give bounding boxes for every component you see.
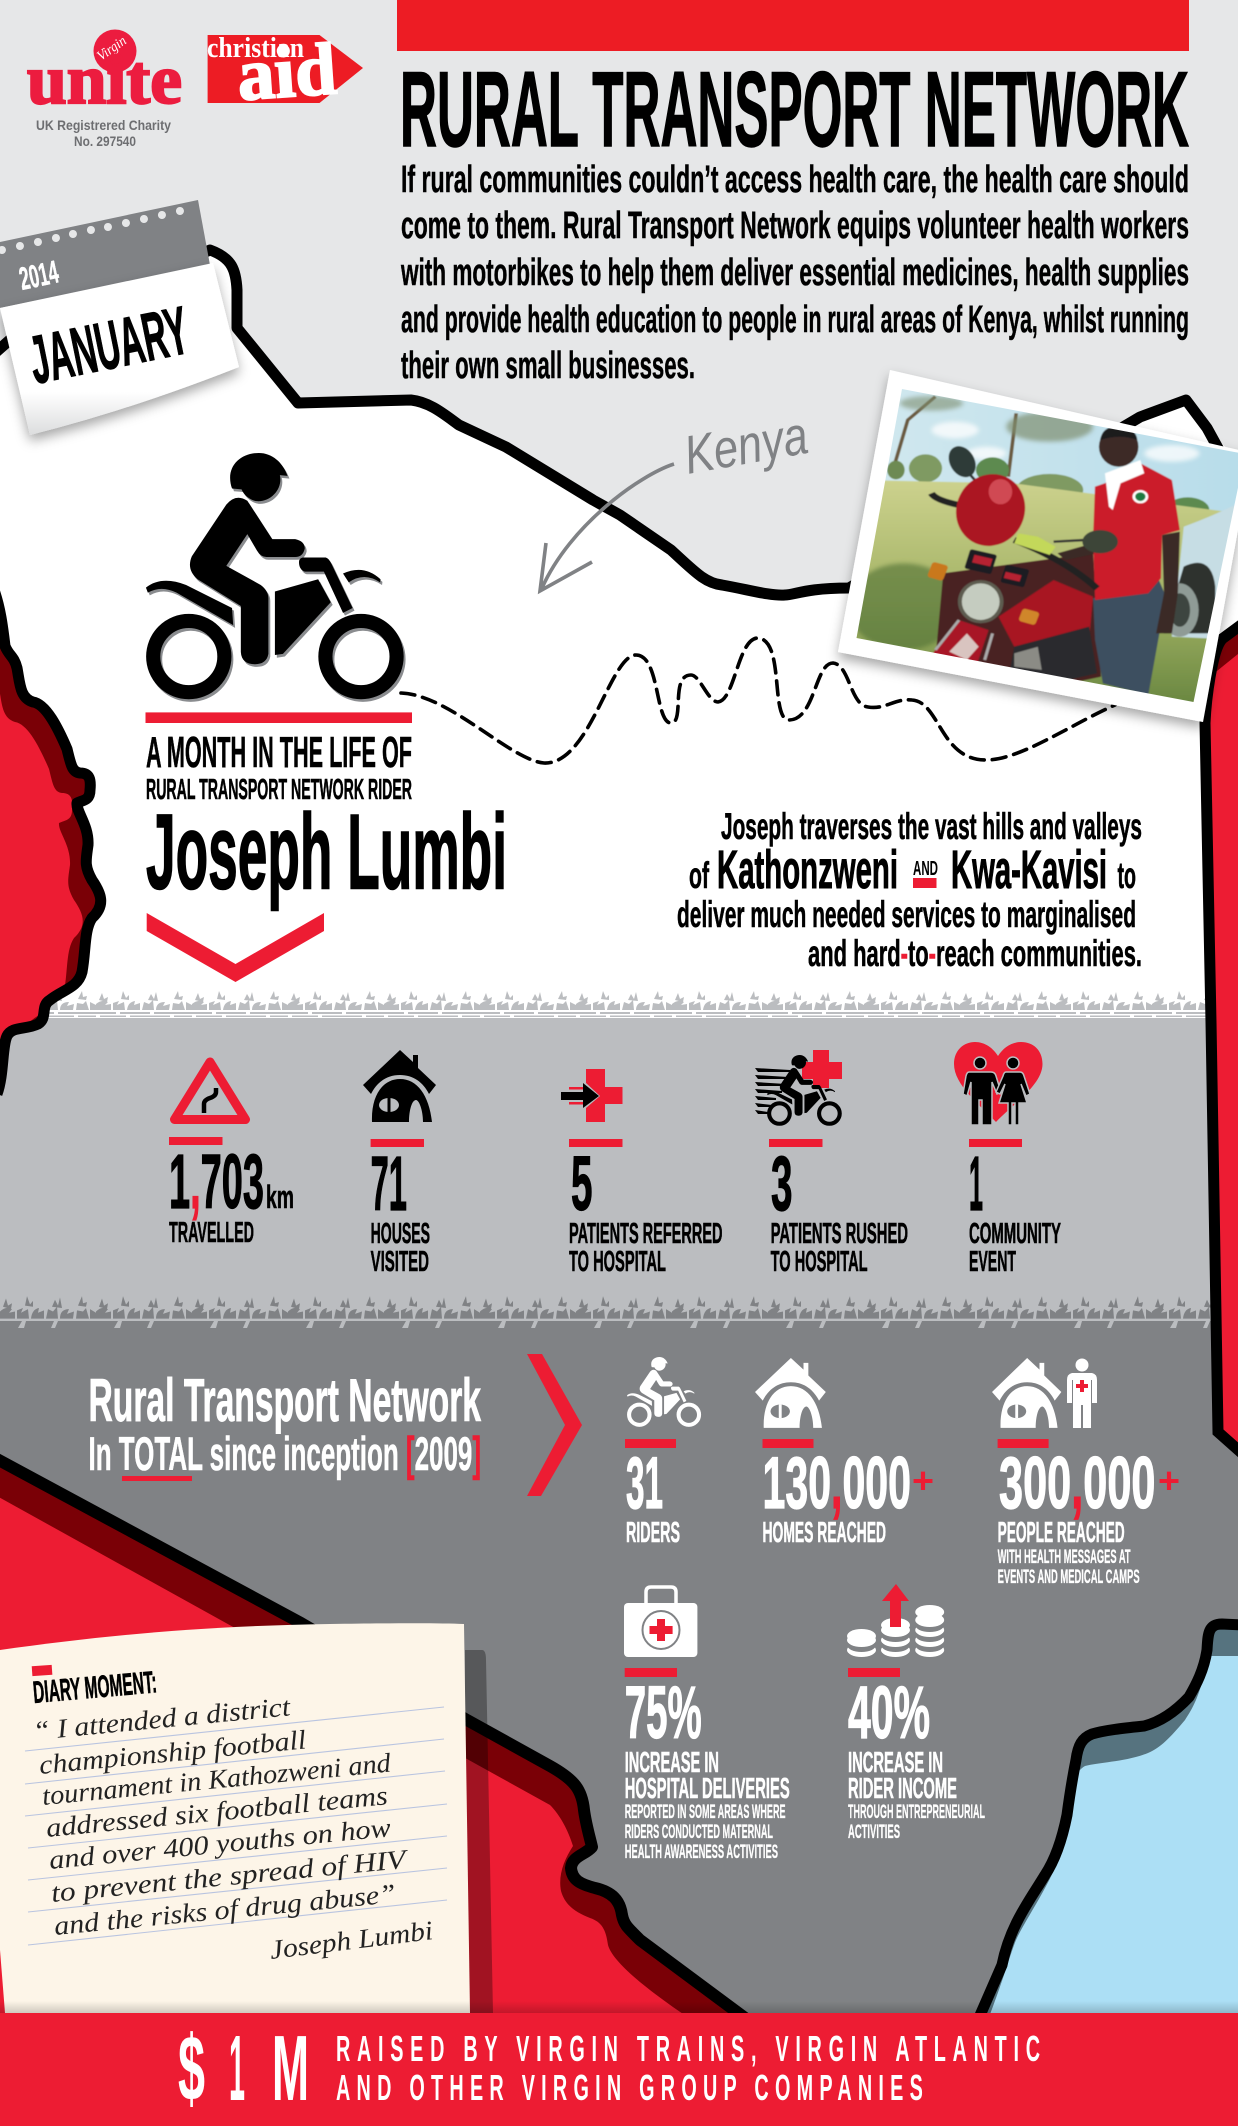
tyre track: white to light grey bbox=[0, 990, 1238, 1018]
diary note: “ I attended a district bbox=[32, 1691, 293, 1746]
total: 40% rider income: ACTIVITIES bbox=[848, 1822, 900, 1843]
total: 300,000+ people reached bbox=[992, 1358, 1180, 1588]
total: 75% hospital deliveries: HOSPITAL DELIVERIES bbox=[625, 1773, 790, 1805]
map: Indian Ocean blue region bbox=[978, 1624, 1238, 2020]
stat: 5 patients referred to hospital: TO HOSPITAL bbox=[569, 1246, 666, 1278]
total: 300,000+ people reached: + bbox=[1158, 1460, 1180, 1501]
footer band bbox=[0, 2013, 1238, 2126]
map: lower-left red region (Tanzania) bbox=[0, 1458, 745, 2018]
stat: 1,703 km travelled: 1,703 bbox=[169, 1139, 264, 1225]
stat: 1,703 km travelled: TRAVELLED bbox=[169, 1217, 254, 1249]
total: 40% rider income: 40% bbox=[848, 1671, 930, 1754]
calendar: January 2014: JANUARY bbox=[23, 292, 195, 399]
diary note: and the risks of drug abuse” bbox=[53, 1878, 397, 1941]
calendar: January 2014: 2014 bbox=[16, 254, 62, 297]
total: 75% hospital deliveries: RIDERS CONDUCTED MATERNAL bbox=[625, 1822, 773, 1843]
total: 130,000+ homes reached: HOMES REACHED bbox=[762, 1517, 886, 1549]
diary note: championship football bbox=[38, 1724, 307, 1780]
total: 75% hospital deliveries: INCREASE IN bbox=[625, 1747, 719, 1779]
intro paragraph: their own small businesses. bbox=[401, 345, 695, 387]
total: 75% hospital deliveries: 75% bbox=[625, 1671, 702, 1754]
diary note: DIARY MOMENT: bbox=[32, 1664, 158, 1710]
stat: 1 community event bbox=[954, 1042, 1061, 1278]
total: 130,000+ homes reached bbox=[755, 1358, 934, 1549]
total: 75% hospital deliveries bbox=[624, 1587, 790, 1863]
stat: 1 community event: EVENT bbox=[969, 1246, 1016, 1278]
logo: Virgin Unite bbox=[27, 30, 182, 149]
total: 40% rider income: INCREASE IN bbox=[848, 1747, 943, 1779]
footer band: 1 bbox=[229, 2016, 245, 2120]
totals heading bbox=[88, 1367, 481, 1481]
total: 40% rider income bbox=[847, 1584, 985, 1843]
footer band: AND OTHER VIRGIN GROUP COMPANIES bbox=[336, 2069, 923, 2109]
stat: 71 houses visited: VISITED bbox=[371, 1246, 429, 1278]
logo: Virgin Unite: Virgin bbox=[95, 34, 130, 64]
handwritten label: Kenya: Kenya bbox=[680, 405, 812, 486]
logo: Christian Aid: christian bbox=[207, 32, 304, 64]
text block: Joseph traverses: Kwa-Kavisi bbox=[951, 840, 1107, 900]
logo: Virgin Unite: No. 297540 bbox=[74, 133, 136, 149]
top red bar bbox=[397, 0, 1189, 51]
stat: 5 patients referred to hospital: 5 bbox=[571, 1141, 592, 1227]
map: left red region (Uganda) bbox=[0, 590, 106, 1096]
map border: northern Kenya line bbox=[0, 250, 1230, 595]
stat: 71 houses visited: 71 bbox=[371, 1141, 407, 1227]
diary note: addressed six football teams bbox=[45, 1780, 389, 1843]
shadow above footer bbox=[0, 2001, 1238, 2013]
stat: 3 patients rushed to hospital: PATIENTS RUSHED bbox=[771, 1218, 908, 1250]
total: 300,000+ people reached: 300,000 bbox=[999, 1443, 1156, 1524]
total: 31 riders bbox=[625, 1357, 699, 1549]
text block: Joseph traverses: AND bbox=[913, 858, 938, 880]
diary note: Joseph Lumbi bbox=[268, 1915, 435, 1965]
red rule above rider title bbox=[146, 712, 412, 723]
stat: 5 patients referred to hospital: PATIENTS REFERRED bbox=[569, 1218, 722, 1250]
diary note: to prevent the spread of HIV bbox=[50, 1844, 411, 1908]
text block: Joseph traverses: of bbox=[689, 855, 709, 896]
stat: 1 community event: COMMUNITY bbox=[969, 1218, 1061, 1250]
arrow: Kenya pointer bbox=[540, 464, 674, 591]
band: totals background bbox=[0, 1328, 1238, 2018]
stat: 5 patients referred to hospital bbox=[561, 1069, 722, 1278]
total: 75% hospital deliveries: HEALTH AWARENESS ACTIVITIES bbox=[625, 1842, 778, 1863]
total: 31 riders: RIDERS bbox=[626, 1517, 680, 1549]
totals heading: In TOTAL since inception [2009] bbox=[88, 1427, 481, 1480]
total: 130,000+ homes reached: 130,000 bbox=[762, 1443, 911, 1524]
text block: Joseph traverses: Kathonzweni bbox=[717, 840, 898, 900]
total: 40% rider income: RIDER INCOME bbox=[848, 1773, 957, 1805]
text: Joseph Lumbi bbox=[146, 792, 507, 912]
stat: 1 community event: 1 bbox=[969, 1141, 983, 1227]
stat: 3 patients rushed to hospital: TO HOSPITAL bbox=[771, 1246, 868, 1278]
icon: motorbike rider bbox=[146, 453, 399, 695]
footer band: M bbox=[272, 2016, 309, 2120]
stat: 3 patients rushed to hospital bbox=[755, 1050, 908, 1278]
rider heading bbox=[146, 728, 507, 912]
stat: 1,703 km travelled: km bbox=[266, 1179, 294, 1215]
intro paragraph bbox=[400, 159, 1189, 387]
neighbouring land: light grey top area bbox=[0, 0, 1238, 595]
diary note: and over 400 youths on how bbox=[48, 1812, 392, 1875]
calendar: January 2014 bbox=[0, 200, 239, 435]
logo: Virgin Unite: unite bbox=[27, 42, 182, 119]
footer band: $ bbox=[178, 2016, 205, 2120]
text: THROUGH ENTREPRENEURIAL bbox=[848, 1802, 985, 1823]
logo: Christian Aid bbox=[207, 28, 363, 117]
photo: Joseph with motorbike bbox=[837, 370, 1238, 723]
tyre track: light grey to dark grey bbox=[0, 1295, 1238, 1328]
diary note: tournament in Kathozweni and bbox=[41, 1748, 392, 1811]
footer band: RAISED BY VIRGIN TRAINS, VIRGIN ATLANTIC bbox=[336, 2030, 1040, 2070]
text: REPORTED IN SOME AREAS WHERE bbox=[625, 1802, 786, 1823]
stat: 71 houses visited bbox=[363, 1050, 436, 1278]
map: right red region (Somalia) bbox=[1205, 622, 1238, 1456]
logo: Virgin Unite: UK Registrered Charity bbox=[36, 117, 171, 133]
text block: Joseph traverses: to bbox=[1118, 855, 1136, 896]
text block: Joseph traverses bbox=[677, 806, 1142, 974]
stat: 3 patients rushed to hospital: 3 bbox=[771, 1141, 792, 1227]
logo: Christian Aid: aid bbox=[234, 28, 339, 117]
rider heading: RURAL TRANSPORT NETWORK RIDER bbox=[146, 774, 412, 806]
diary note bbox=[0, 1623, 470, 2013]
chevron: pointing right bbox=[527, 1354, 582, 1496]
band: monthly stats background bbox=[0, 1018, 1238, 1328]
stat: 1,703 km travelled bbox=[169, 1062, 294, 1249]
diary note shadow bbox=[465, 1650, 493, 2013]
totals heading: Rural Transport Network bbox=[88, 1367, 481, 1434]
total: 130,000+ homes reached: + bbox=[912, 1460, 934, 1501]
chevron: pointing down bbox=[147, 913, 324, 982]
stat: 71 houses visited: HOUSES bbox=[371, 1218, 430, 1250]
rider heading: A MONTH IN THE LIFE OF bbox=[146, 728, 412, 777]
total: 31 riders: 31 bbox=[626, 1443, 663, 1524]
route: dashed line bbox=[401, 638, 1115, 763]
